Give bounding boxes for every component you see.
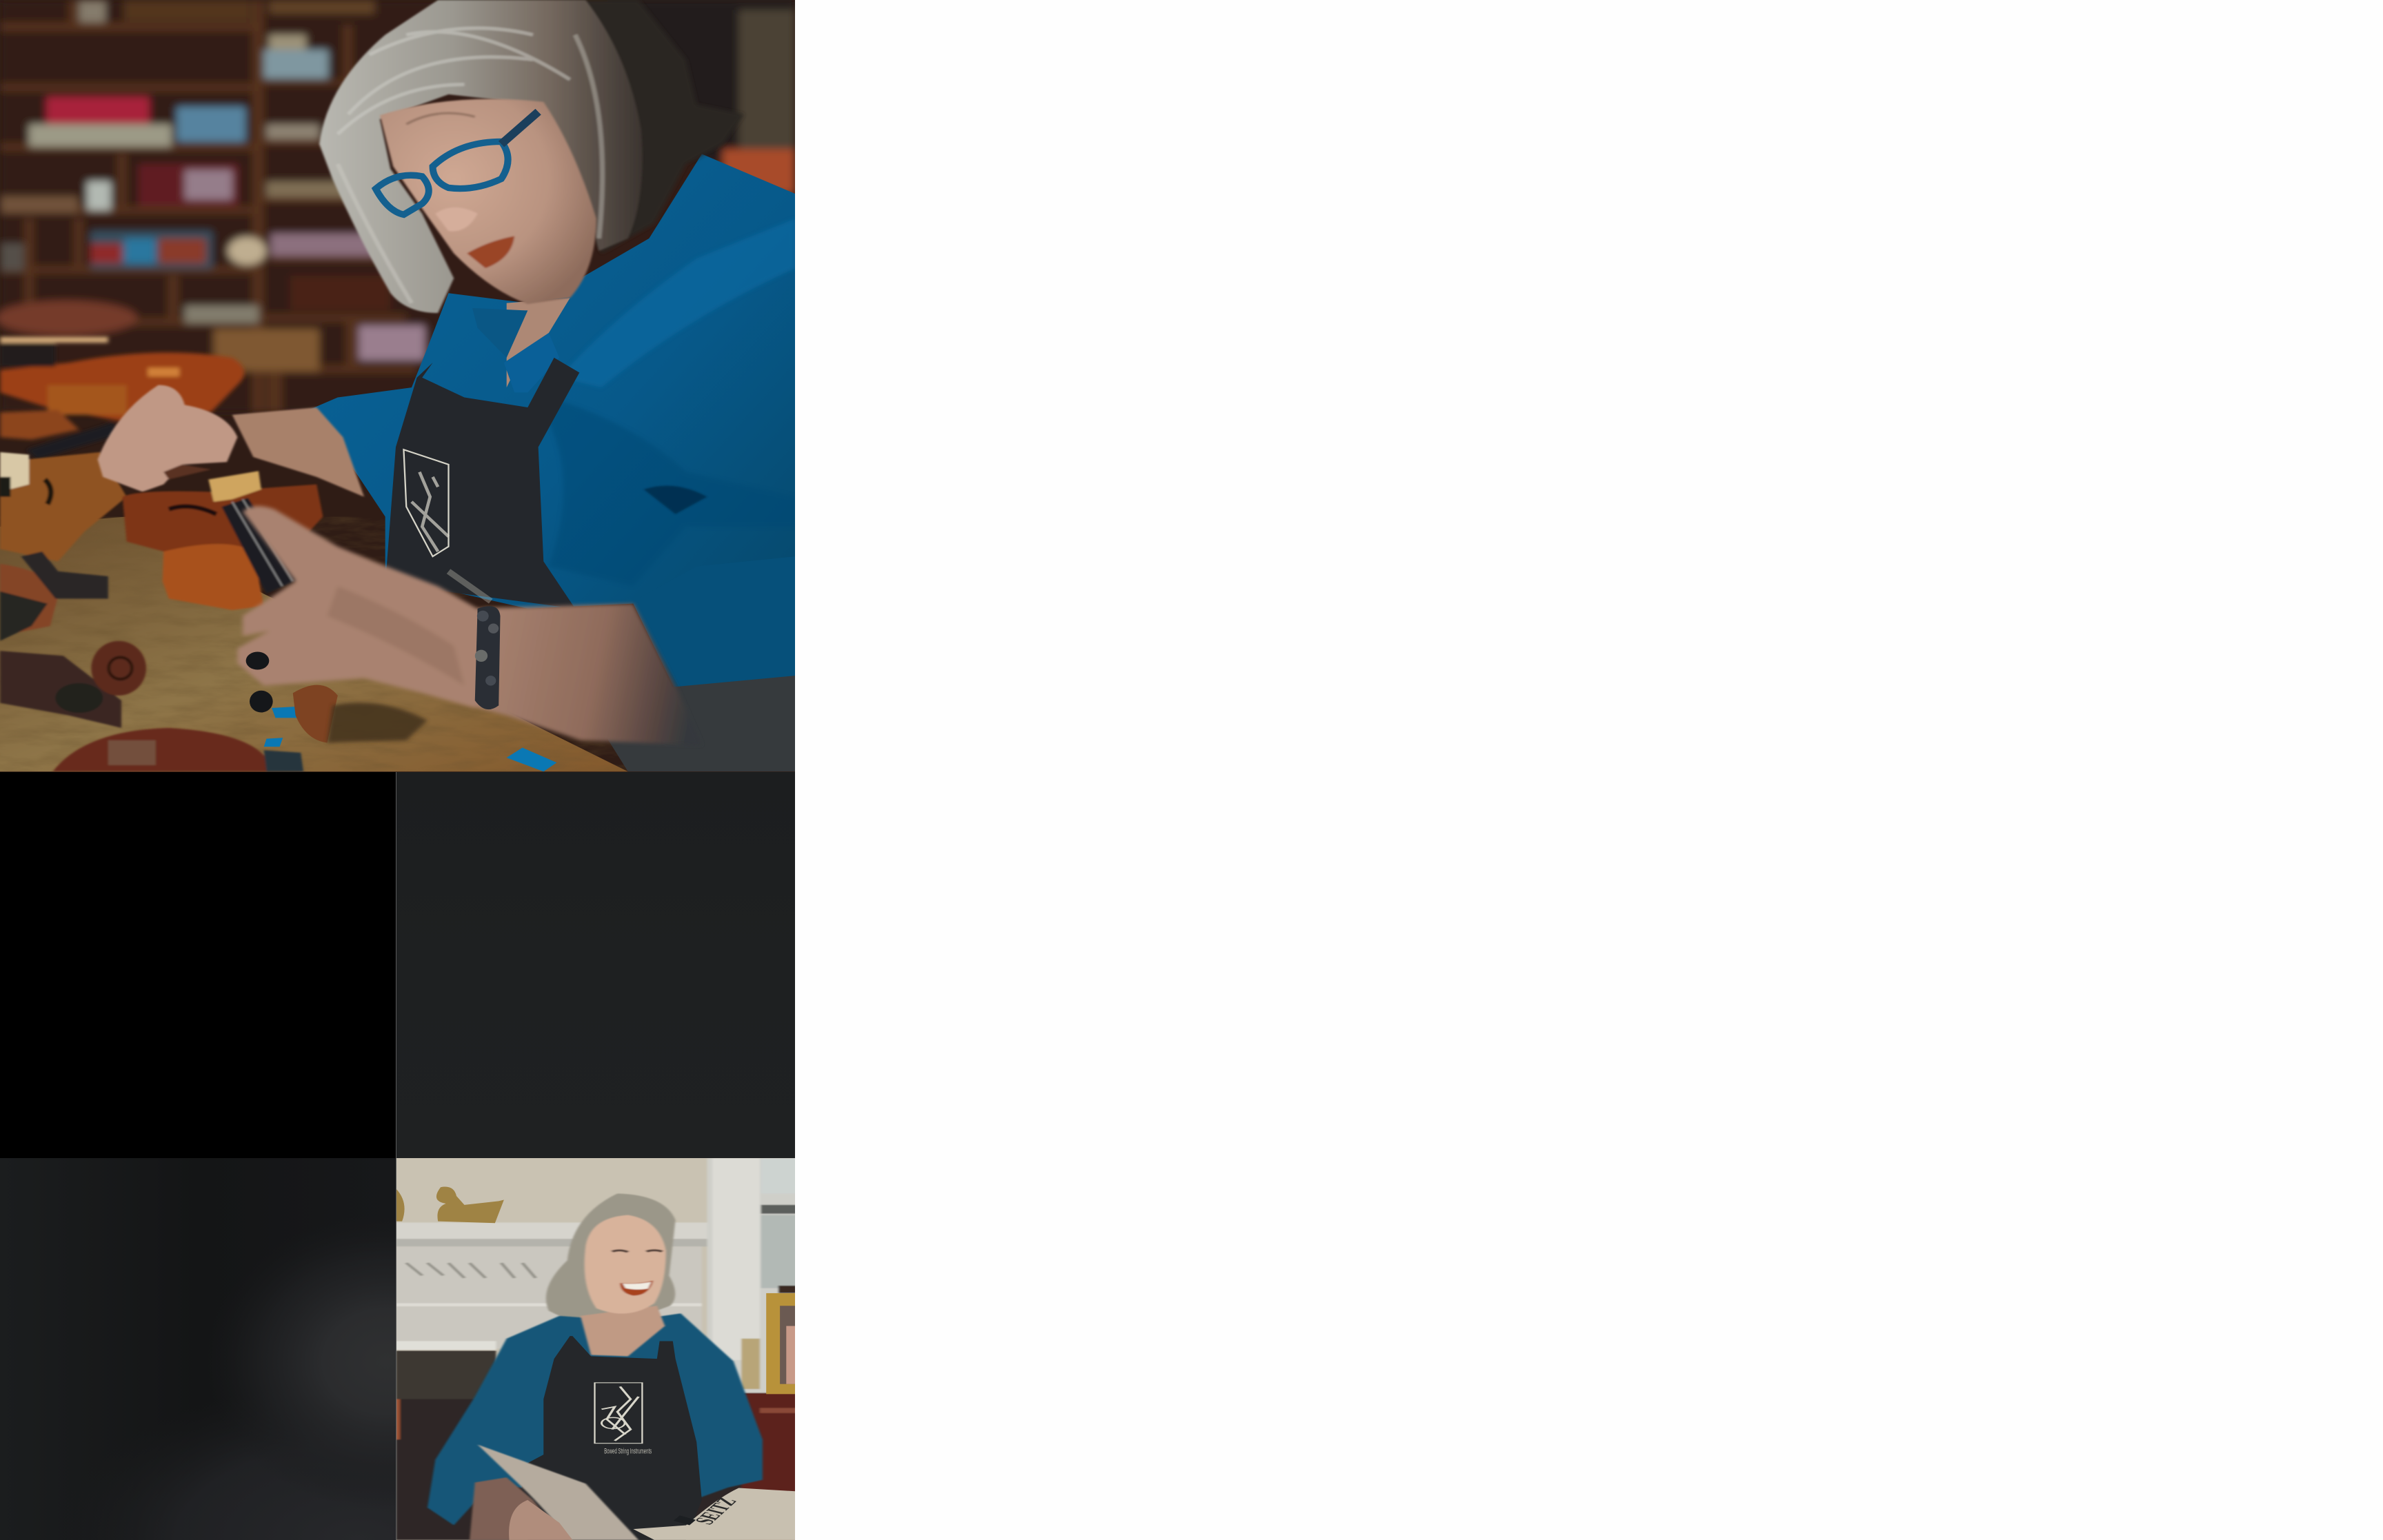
- shirt: [428, 1313, 763, 1526]
- hair: [546, 1193, 676, 1321]
- brass ducks: [396, 1187, 504, 1223]
- panel: black block: [0, 772, 396, 1158]
- sheet music right: [633, 1488, 795, 1540]
- left violin: [0, 452, 303, 771]
- photo: violin maker at workbench: [0, 0, 795, 772]
- tuning pegs and scroll: [246, 652, 428, 742]
- forearm and left hand: [98, 385, 364, 497]
- apron logo: [594, 1383, 642, 1443]
- workbench: [0, 517, 628, 771]
- forearms: [470, 1477, 565, 1540]
- glasses: [376, 112, 539, 214]
- apron: [520, 1336, 702, 1540]
- panel: dark gradient block: [396, 772, 795, 1158]
- room background: [396, 1158, 798, 1540]
- dark fade at bottom right: [608, 676, 795, 772]
- picture frame: [766, 1293, 798, 1394]
- apron: [386, 358, 579, 609]
- hair front: [319, 0, 643, 313]
- background violins: [0, 337, 244, 460]
- hand on music: [509, 1500, 572, 1540]
- panel: dark block with soft glow: [0, 1158, 396, 1540]
- shirt: [309, 154, 795, 696]
- bracelet: [674, 1515, 696, 1525]
- hair back: [587, 1, 744, 251]
- face: [380, 99, 596, 304]
- sheet music left: [478, 1445, 639, 1540]
- photo: smiling violin maker with sheet music: [396, 1158, 798, 1540]
- main violin: [123, 471, 323, 610]
- neck and face: [581, 1215, 666, 1356]
- right hand and forearm: [237, 506, 702, 745]
- bracelet: [475, 606, 501, 709]
- blue tape chips: [264, 707, 556, 771]
- apron: Bowed String Instruments: [604, 1447, 652, 1455]
- shelves background: [0, 0, 795, 412]
- sheet music right: SEITZ: [690, 1496, 743, 1527]
